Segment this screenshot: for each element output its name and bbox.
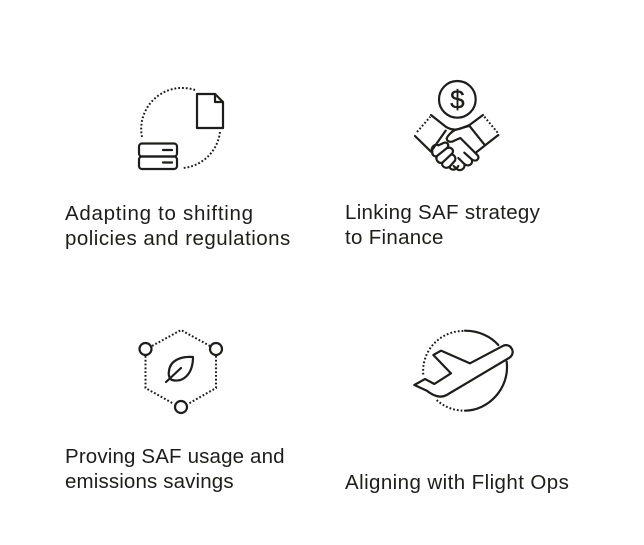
text: adapting to shifting policies xyxy=(65,202,291,250)
text: proving SAF usage xyxy=(65,444,285,492)
text: linking SAF strategy: Linking SAF strategy xyxy=(345,200,540,224)
text: aligning with flight ops: Aligning with Flight Ops xyxy=(345,470,569,494)
text: adapting to shifting policies: policies and regulations xyxy=(65,227,291,250)
text: proving SAF usage: Proving SAF usage and xyxy=(65,444,285,468)
icon: airplane over circle xyxy=(414,331,513,411)
text: proving SAF usage: emissions savings xyxy=(65,470,234,492)
icon: leaf in hexagon network xyxy=(140,330,222,413)
icon: handshake with dollar coin xyxy=(415,81,498,170)
icon: document and server cycle xyxy=(139,88,223,169)
text: linking SAF strategy: to Finance xyxy=(345,226,444,249)
text: linking SAF strategy xyxy=(345,200,540,249)
text: adapting to shifting policies: Adapting to shifting xyxy=(65,202,254,224)
icon: handshake with dollar coin: $ xyxy=(450,85,465,115)
